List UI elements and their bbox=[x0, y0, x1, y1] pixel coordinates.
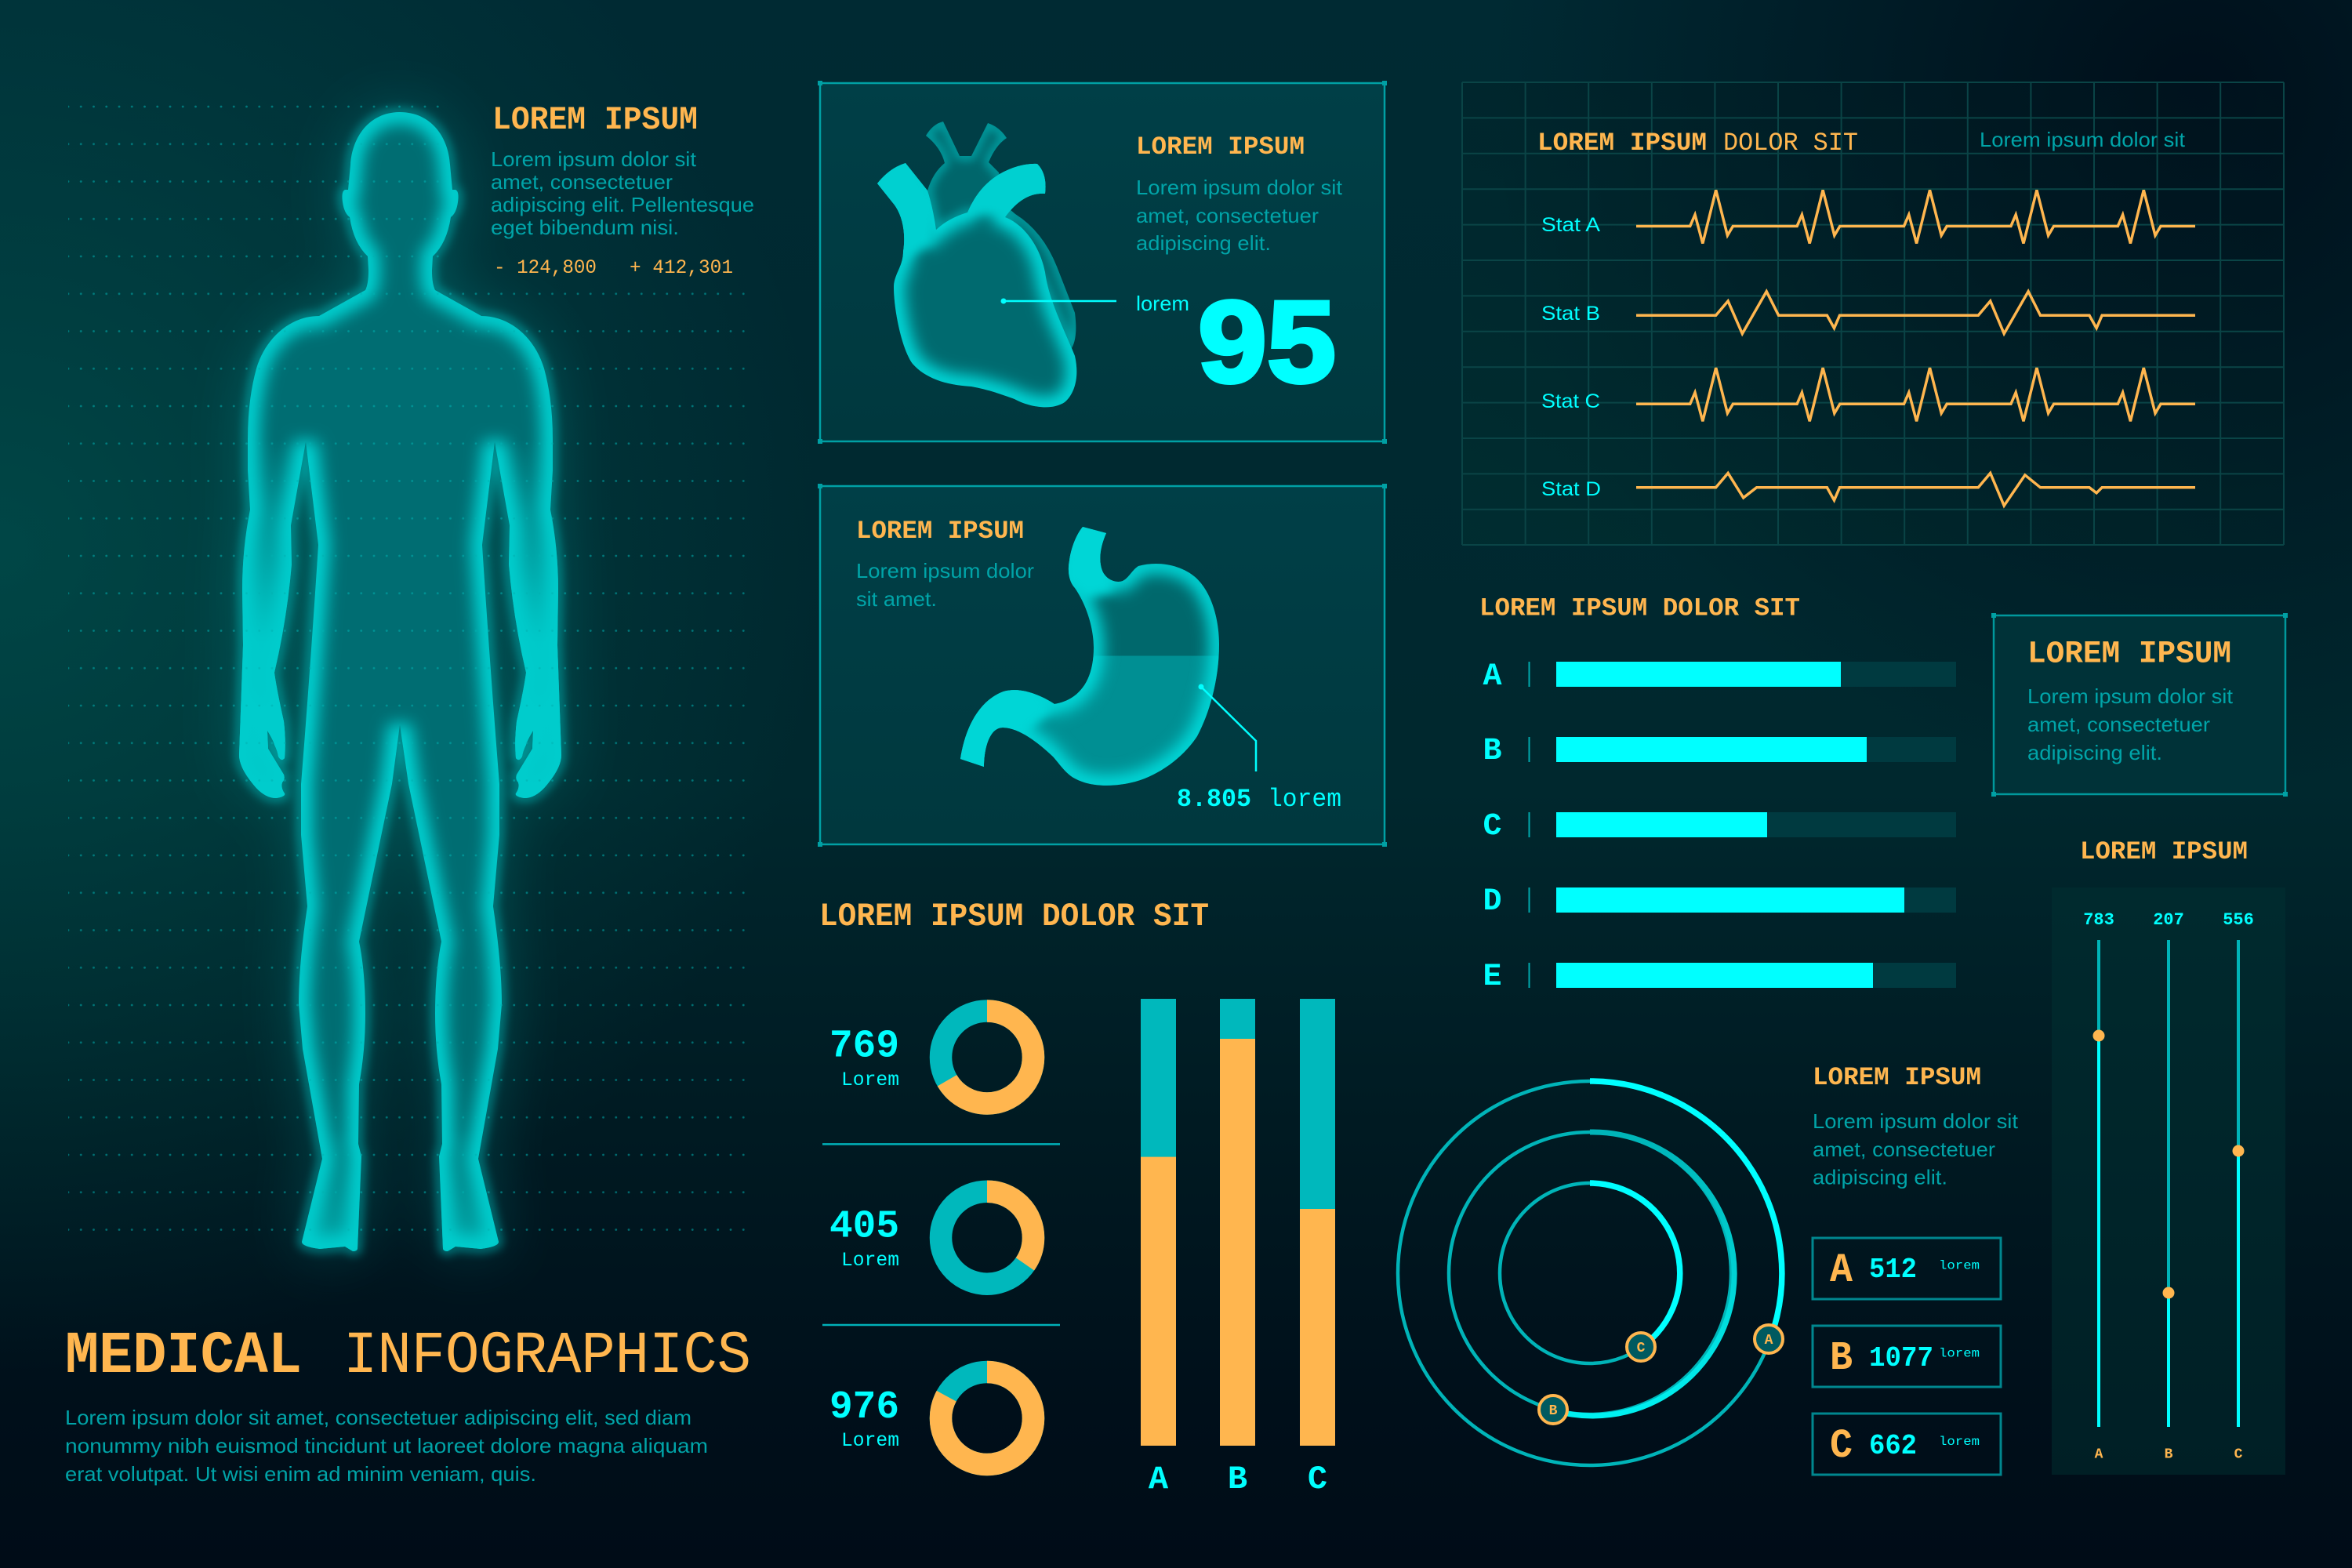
stat A row bbox=[1541, 190, 2195, 243]
vertical slider chart bbox=[2052, 837, 2285, 1475]
orbit text: amet, consectetuer bbox=[1813, 1138, 1995, 1161]
orbit text: LOREM IPSUM bbox=[1813, 1063, 1981, 1092]
panel: stomach bbox=[818, 484, 1387, 847]
orbit text bbox=[1813, 1063, 2019, 1189]
stacked bar chart bbox=[1141, 999, 1335, 1498]
slider B bbox=[2153, 910, 2184, 1463]
bar B bbox=[1483, 734, 1956, 769]
dot grid bbox=[68, 102, 750, 1235]
text block: body note: amet, consectetuer bbox=[491, 170, 673, 194]
bar E: E bbox=[1483, 960, 1502, 995]
stat box C bbox=[1813, 1414, 2001, 1475]
panel: small note: amet, consectetuer bbox=[2027, 713, 2210, 736]
slider B: 207 bbox=[2153, 910, 2184, 930]
radial orbit chart bbox=[1398, 1081, 1783, 1465]
slider C: 556 bbox=[2223, 910, 2254, 930]
stomach text: LOREM IPSUM bbox=[856, 517, 1024, 546]
icon: stomach bbox=[960, 527, 1219, 786]
heart text: lorem bbox=[1136, 292, 1189, 315]
intro paragraph bbox=[65, 1406, 708, 1486]
stacked bar C: C bbox=[1308, 1461, 1327, 1498]
bar B: B bbox=[1483, 734, 1502, 769]
stat box B: 1077 bbox=[1869, 1342, 1933, 1374]
stat C row bbox=[1541, 368, 2195, 421]
stat B row: Stat B bbox=[1541, 303, 1600, 325]
marker B: B bbox=[1549, 1403, 1558, 1419]
panel: stats ECG bbox=[1462, 82, 2284, 545]
stat A row: Stat A bbox=[1541, 214, 1600, 236]
stat box C: 662 bbox=[1869, 1430, 1917, 1462]
orbit text: adipiscing elit. bbox=[1813, 1165, 1947, 1189]
stat box A bbox=[1813, 1238, 2001, 1299]
stats heading: DOLOR SIT bbox=[1723, 129, 1858, 158]
donut section heading: LOREM IPSUM DOLOR SIT bbox=[819, 898, 1209, 935]
marker A bbox=[1755, 1325, 1783, 1353]
slider A: A bbox=[2095, 1447, 2103, 1463]
donut 769 bbox=[829, 1011, 1033, 1104]
panel: small note bbox=[1991, 613, 2288, 797]
donut 976: 976 bbox=[829, 1385, 899, 1430]
heart text bbox=[1136, 132, 1343, 407]
bar A: A bbox=[1483, 659, 1502, 695]
slider heading: LOREM IPSUM bbox=[2080, 837, 2248, 866]
stacked bar B bbox=[1220, 999, 1255, 1498]
stat box B: lorem bbox=[1939, 1347, 1980, 1361]
marker C: C bbox=[1637, 1341, 1646, 1356]
marker B bbox=[1539, 1396, 1567, 1424]
bar C: C bbox=[1483, 809, 1502, 844]
pointer: heart bbox=[1000, 298, 1116, 304]
donut 769: 769 bbox=[829, 1024, 899, 1069]
donut 769: Lorem bbox=[841, 1069, 899, 1091]
heart text: Lorem ipsum dolor sit bbox=[1136, 176, 1343, 199]
stacked bar A: A bbox=[1149, 1461, 1169, 1498]
stacked bar C bbox=[1300, 999, 1335, 1498]
title: INFOGRAPHICS bbox=[343, 1323, 751, 1390]
donut 405: Lorem bbox=[841, 1249, 899, 1272]
stacked bar A bbox=[1141, 999, 1176, 1498]
panel: heart bbox=[818, 81, 1387, 444]
panel: small note: Lorem ipsum dolor sit bbox=[2027, 684, 2234, 708]
stacked bar B: B bbox=[1228, 1461, 1247, 1498]
donut 976 bbox=[829, 1372, 1033, 1465]
stat box B: B bbox=[1830, 1335, 1853, 1381]
slider A bbox=[2083, 910, 2114, 1463]
slider C: C bbox=[2234, 1447, 2243, 1463]
slider C bbox=[2223, 910, 2254, 1463]
bar D bbox=[1483, 884, 1956, 920]
stat D row bbox=[1541, 474, 2195, 506]
intro paragraph: nonummy nibh euismod tincidunt ut laoreet dolore magna aliquam bbox=[65, 1434, 708, 1457]
slider B: B bbox=[2165, 1447, 2173, 1463]
stats heading: LOREM IPSUM bbox=[1537, 129, 1707, 158]
stat B row bbox=[1541, 292, 2195, 334]
heart text: LOREM IPSUM bbox=[1136, 132, 1305, 162]
stats heading: Lorem ipsum dolor sit bbox=[1980, 128, 2186, 151]
horizontal bar chart bbox=[1479, 594, 1956, 995]
stat box C: lorem bbox=[1939, 1435, 1980, 1449]
stat C row: Stat C bbox=[1541, 390, 1600, 412]
text block: body note: eget bibendum nisi. bbox=[491, 216, 679, 239]
stats heading bbox=[1537, 128, 2186, 158]
panel: small note: adipiscing elit. bbox=[2027, 741, 2162, 764]
slider A: 783 bbox=[2083, 910, 2114, 930]
stomach text: Lorem ipsum dolor bbox=[856, 559, 1034, 583]
bar C bbox=[1483, 809, 1956, 844]
stomach text: 8.805 bbox=[1177, 785, 1251, 814]
stat D row: Stat D bbox=[1541, 478, 1601, 500]
stat box A: A bbox=[1830, 1247, 1853, 1294]
title bbox=[65, 1323, 751, 1390]
stat box A: 512 bbox=[1869, 1254, 1917, 1286]
stomach text: lorem bbox=[1268, 785, 1341, 814]
marker C bbox=[1627, 1333, 1655, 1361]
bar E bbox=[1483, 960, 1956, 995]
bar D: D bbox=[1483, 884, 1502, 920]
human body silhouette bbox=[220, 94, 580, 1270]
bar chart heading: LOREM IPSUM DOLOR SIT bbox=[1479, 594, 1800, 622]
donut 405: 405 bbox=[829, 1205, 899, 1250]
slider panel bbox=[2052, 887, 2285, 1475]
panel: small note: LOREM IPSUM bbox=[2027, 637, 2231, 673]
icon: heart bbox=[877, 122, 1077, 408]
intro paragraph: erat volutpat. Ut wisi enim ad minim veniam, quis. bbox=[65, 1462, 536, 1486]
title: MEDICAL bbox=[65, 1323, 302, 1390]
heart text: 95 bbox=[1198, 278, 1336, 407]
stomach text: sit amet. bbox=[856, 587, 937, 611]
bar A bbox=[1483, 659, 1956, 695]
text block: body note: LOREM IPSUM bbox=[492, 101, 698, 139]
stat box C: C bbox=[1830, 1423, 1853, 1469]
text block: body note: Lorem ipsum dolor sit bbox=[491, 147, 697, 171]
orbit text: Lorem ipsum dolor sit bbox=[1813, 1109, 2019, 1133]
text block: body note bbox=[491, 101, 754, 279]
text block: body note: adipiscing elit. Pellentesque bbox=[491, 193, 754, 216]
stomach text bbox=[856, 517, 1341, 814]
text block: body note: + 412,301 bbox=[630, 256, 733, 279]
intro paragraph: Lorem ipsum dolor sit amet, consectetuer adipiscing elit, sed diam bbox=[65, 1406, 691, 1429]
text block: body note: - 124,800 bbox=[494, 256, 597, 279]
donut 976: Lorem bbox=[841, 1429, 899, 1452]
marker A: A bbox=[1765, 1333, 1773, 1348]
heart text: adipiscing elit. bbox=[1136, 231, 1271, 255]
stat box B bbox=[1813, 1326, 2001, 1387]
stat box A: lorem bbox=[1939, 1259, 1980, 1273]
pointer: stomach bbox=[1198, 684, 1256, 771]
heart text: amet, consectetuer bbox=[1136, 204, 1319, 227]
donut 405 bbox=[829, 1192, 1033, 1284]
